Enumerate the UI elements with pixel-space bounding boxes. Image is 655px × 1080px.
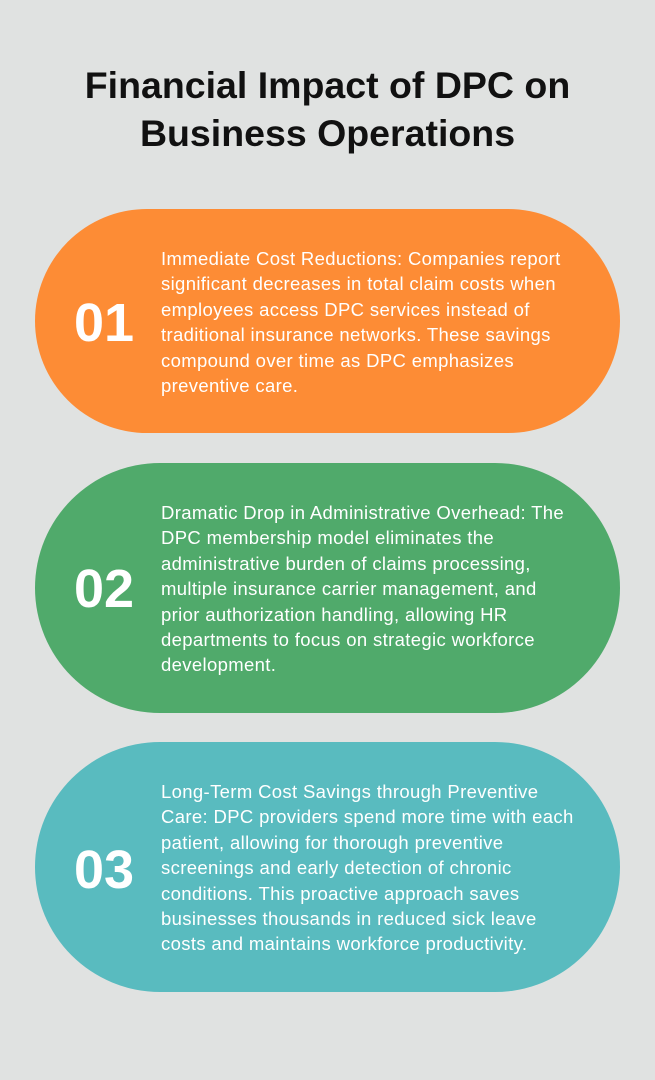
text 01: significant decreases in total claim costs when (161, 273, 556, 294)
text 02: development. (161, 654, 276, 675)
text 01: compound over time as DPC emphasizes (161, 350, 514, 371)
number 03: 03 (74, 840, 134, 900)
text 02: DPC membership model eliminates the (161, 527, 494, 548)
text 03: screenings and early detection of chronic (161, 857, 512, 878)
text 02: multiple insurance carrier management, and (161, 578, 537, 599)
text 03: patient, allowing for thorough preventive (161, 832, 503, 853)
text 01: traditional insurance networks. These savings (161, 324, 551, 345)
text 02: administrative burden of claims processing, (161, 553, 531, 574)
number 01: 01 (74, 293, 134, 353)
title (85, 64, 570, 154)
number 02: 02 (74, 559, 134, 619)
text 01 (161, 248, 561, 396)
text 03: conditions. This proactive approach saves (161, 883, 520, 904)
text 03 (161, 781, 574, 954)
title: Business Operations (140, 112, 515, 154)
text 03: businesses thousands in reduced sick leave (161, 908, 537, 929)
text 01: Immediate Cost Reductions: Companies report (161, 248, 561, 269)
text 01: preventive care. (161, 375, 298, 396)
text 02: departments to focus on strategic workforce (161, 629, 535, 650)
text 02: Dramatic Drop in Administrative Overhead: The (161, 502, 564, 523)
text 01: employees access DPC services instead of (161, 299, 530, 320)
panel: 02 (35, 463, 620, 713)
text 02 (161, 502, 564, 675)
text 02: prior authorization handling, allowing HR (161, 604, 508, 625)
text 03: Long-Term Cost Savings through Preventive (161, 781, 538, 802)
text 03: costs and maintains workforce productivity. (161, 933, 527, 954)
panel: 03 (35, 742, 620, 992)
title: Financial Impact of DPC on (85, 64, 570, 106)
text 03: Care: DPC providers spend more time with each (161, 806, 574, 827)
panel: 01 (35, 209, 620, 433)
